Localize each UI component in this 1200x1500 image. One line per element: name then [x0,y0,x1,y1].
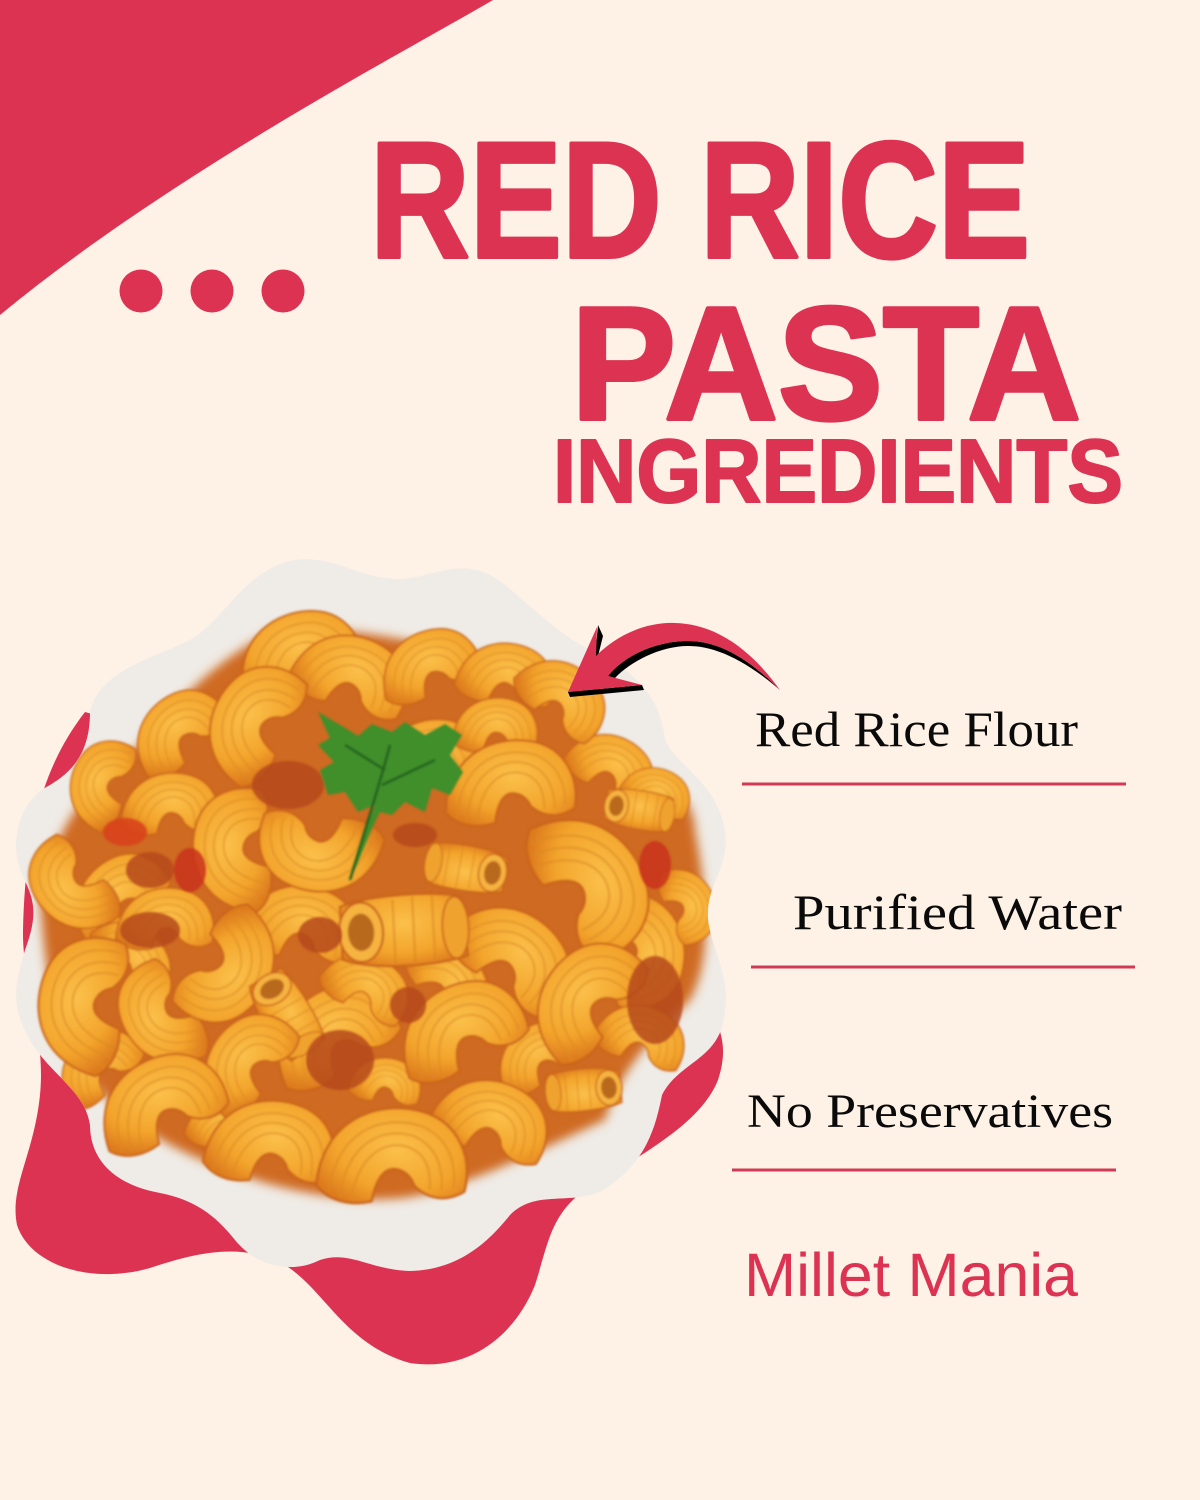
red blob behind photo [16,712,723,1364]
pasta pieces [13,607,722,1222]
title line: ingredients: INGREDIENTS [553,422,1123,522]
ingredient: red rice flour: Red Rice Flour [755,701,1078,757]
cilantro leaf [318,712,463,880]
arrow [568,623,780,697]
ingredient: no preservatives: No Preservatives [747,1085,1113,1138]
ingredient: purified water: Purified Water [793,884,1122,940]
plate [16,559,726,1271]
title line: red rice: RED RICE [370,108,1030,292]
sauce base [40,625,706,1199]
title [370,108,1123,522]
three dots [120,270,304,312]
title line: pasta: PASTA [571,274,1081,454]
pasta photo [13,559,726,1271]
meat sauce [103,761,683,1090]
ingredient list [747,701,1122,1138]
brand name: Millet Mania [744,1241,1078,1309]
corner shape [0,0,493,315]
